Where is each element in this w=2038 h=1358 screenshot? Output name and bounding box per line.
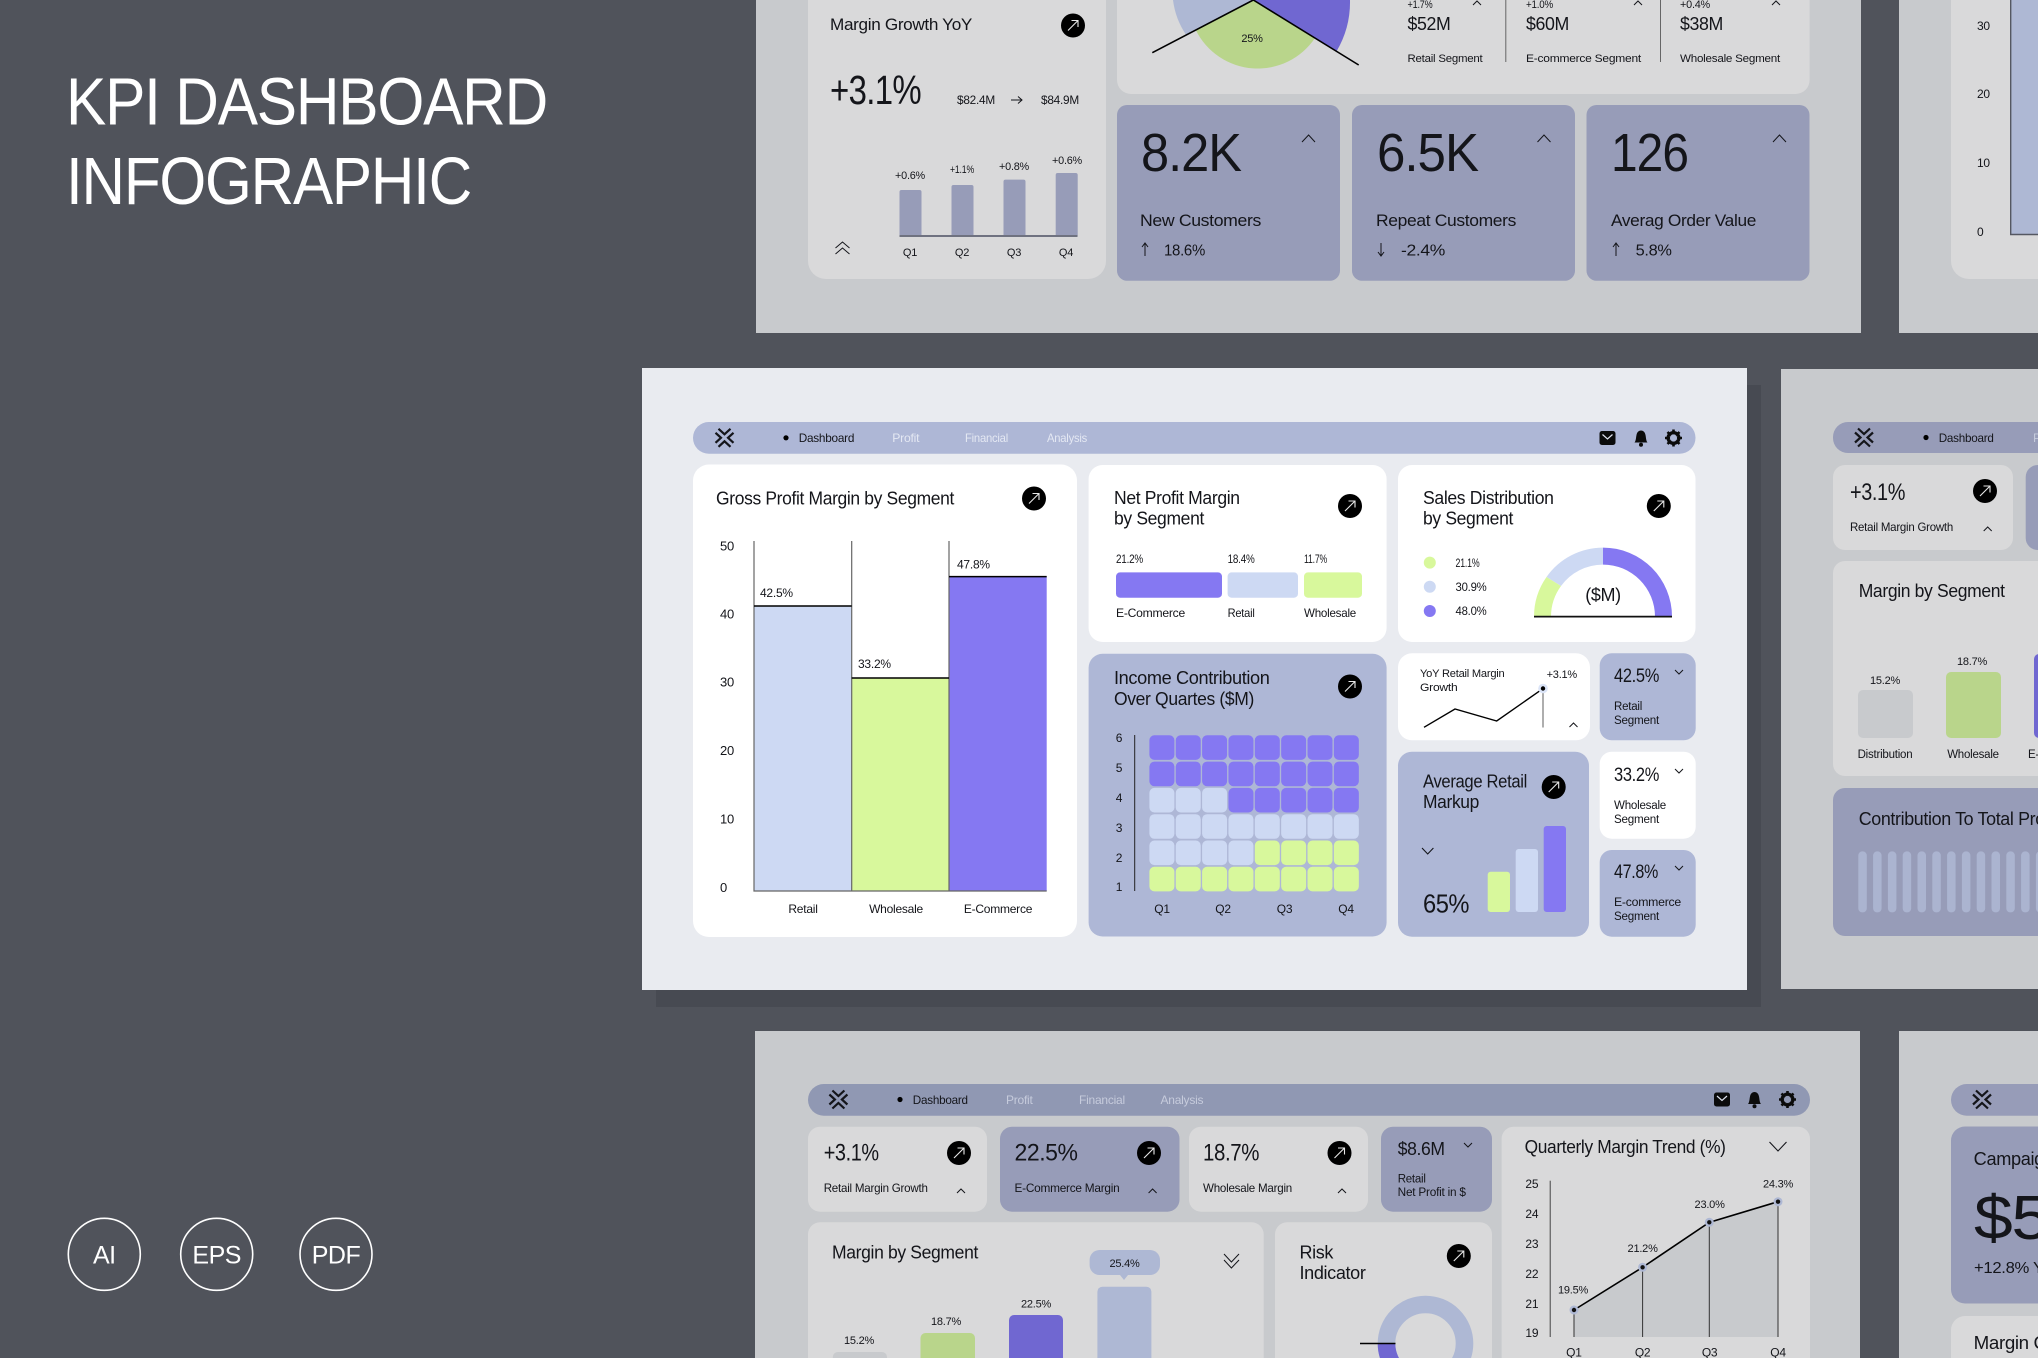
nav bar: [1951, 1084, 2038, 1116]
legend: 30.9%: [1456, 580, 1487, 594]
card: quarterly margin trend: 19: [1525, 1326, 1539, 1340]
card: e-commerce segment: [1600, 850, 1696, 937]
panel: top right dashboard (dimmed): 10: [1977, 156, 1990, 170]
tooltip: 25.4%: [1109, 1258, 1140, 1270]
card: income contribution over quarters: Q1: [1154, 902, 1170, 916]
card: net profit margin by segment: 11.7%: [1304, 552, 1327, 566]
card: net profit margin by segment: Net Profit Margin: [1114, 488, 1240, 508]
card: margin growth yoy: Q2: [955, 247, 969, 259]
card: margin by segment: 22.5%: [1021, 1299, 1051, 1311]
nav bar: Dashboard: [1939, 431, 1994, 445]
card: income contribution over quarters: [1089, 654, 1387, 936]
panel: bottom right dashboard (dimmed): [1899, 1031, 2038, 1358]
card: retail segment: [1600, 653, 1696, 740]
card: income contribution over quarters: 6: [1116, 731, 1123, 745]
card: income contribution over quarters: 5: [1116, 761, 1123, 775]
card: margin growth: [1951, 1316, 2038, 1358]
card: segment revenue with pie: Retail Segment: [1408, 53, 1483, 65]
card: income contribution over quarters: 2: [1116, 851, 1123, 865]
bar chart: [754, 541, 1047, 891]
card: income contribution over quarters: 4: [1116, 791, 1123, 805]
card: income contribution over quarters: Q3: [1277, 902, 1293, 916]
card: yoy retail margin growth: YoY Retail Margin: [1420, 668, 1505, 680]
card: average retail markup: [1398, 752, 1589, 937]
card: new customers: [1117, 105, 1340, 281]
tooltip: [1090, 1250, 1160, 1280]
card: margin growth yoy: Q4: [1059, 247, 1073, 259]
card: quarterly margin trend: 22: [1525, 1267, 1539, 1281]
kpi: retail margin growth: [808, 1127, 987, 1212]
card: margin growth yoy: +3.1%: [830, 67, 921, 113]
central panel shadow: [656, 385, 1761, 1007]
card: margin by segment: 15.2%: [844, 1335, 874, 1347]
heatmap grid: [1149, 735, 1359, 891]
title: [66, 65, 547, 219]
kpi: retail margin growth: Retail Margin Growth: [824, 1181, 928, 1195]
card: income contribution over quarters: Income Contribution: [1114, 668, 1270, 688]
card: income contribution over quarters: 3: [1116, 821, 1123, 835]
card: average order value: 5.8%: [1636, 243, 1672, 260]
card: income contribution over quarters: Q4: [1338, 902, 1354, 916]
card: income contribution over quarters: Q2: [1215, 902, 1231, 916]
gauge chart: ($M): [1585, 585, 1621, 605]
card: quarterly margin trend: 25: [1525, 1177, 1539, 1191]
card: margin by segment: 15.2%: [1870, 675, 1900, 687]
card: quarterly margin trend: 24: [1525, 1207, 1539, 1221]
card: quarterly margin trend: 21: [1525, 1297, 1539, 1311]
bar chart: 42.5%: [760, 586, 793, 600]
card: retail segment: 42.5%: [1614, 666, 1659, 687]
card: margin growth yoy: +0.6%: [1052, 155, 1082, 167]
card: new customers: New Customers: [1140, 211, 1261, 230]
card: segment revenue with pie: $52M: [1408, 14, 1450, 34]
kpi: wholesale margin: 18.7%: [1203, 1140, 1259, 1167]
card: quarterly margin trend: 21.2%: [1628, 1243, 1658, 1255]
card: repeat customers: 6.5K: [1377, 123, 1479, 183]
chart axis labels: 0: [720, 880, 727, 895]
file format badges: PDF: [312, 1242, 360, 1270]
card: segment revenue with pie: 25%: [1241, 33, 1263, 45]
kpi: retail net profit: $8.6M: [1398, 1139, 1445, 1159]
card: margin growth yoy: +0.8%: [999, 161, 1029, 173]
legend: 48.0%: [1456, 604, 1487, 618]
kpi: retail margin growth: +3.1%: [824, 1140, 879, 1167]
kpi: retail net profit: Retail: [1398, 1174, 1426, 1186]
card: margin growth yoy: +1.1%: [950, 164, 974, 176]
card: segment revenue with pie: $38M: [1680, 14, 1723, 34]
kpi card: [1833, 465, 2038, 550]
title: KPI DASHBOARD: [66, 65, 547, 140]
card: wholesale segment: 33.2%: [1614, 765, 1659, 786]
card: quarterly margin trend: 23: [1525, 1237, 1539, 1251]
bar chart: 33.2%: [858, 657, 891, 671]
card: average retail markup: Markup: [1423, 792, 1479, 812]
card: segment revenue with pie: $60M: [1526, 14, 1569, 34]
card: quarterly margin trend: 19.5%: [1558, 1284, 1588, 1296]
card: yoy retail margin growth: [1398, 653, 1590, 740]
chart axis labels: 10: [720, 812, 734, 826]
legend: 21.1%: [1456, 556, 1480, 570]
gauge chart: [1534, 548, 1672, 617]
card: margin by segment: 18.7%: [931, 1316, 961, 1328]
card: yoy retail margin growth: Growth: [1420, 682, 1458, 694]
kpi card: Retail Margin Growth: [1850, 520, 1953, 534]
nav bar: Financial: [1079, 1093, 1125, 1107]
card: margin growth yoy: Q1: [903, 247, 917, 259]
card: average order value: Averag Order Value: [1611, 211, 1756, 230]
file format badges: AI: [93, 1242, 116, 1270]
card: average retail markup: Average Retail: [1423, 772, 1527, 792]
card: net profit margin by segment: by Segment: [1114, 509, 1204, 529]
kpi: wholesale margin: Wholesale Margin: [1203, 1181, 1292, 1195]
panel: top right dashboard (dimmed): [1899, 0, 2038, 333]
card: gross profit margin by segment: E-Commerce: [964, 902, 1033, 916]
card: net profit margin by segment: Wholesale: [1304, 606, 1357, 620]
card: segment revenue with pie: [1117, 0, 1810, 94]
file format badges: EPS: [192, 1242, 241, 1270]
card: new customers: 8.2K: [1141, 123, 1242, 183]
card: margin by segment: [1833, 561, 2038, 776]
card: risk indicator: [1275, 1222, 1492, 1358]
kpi: e-commerce margin: [1000, 1127, 1180, 1212]
nav bar: Financial: [965, 431, 1008, 445]
card: margin growth yoy: [808, 0, 1106, 279]
card: average order value: 126: [1611, 123, 1688, 183]
nav bar: [693, 422, 1696, 454]
card: income contribution over quarters: 1: [1116, 880, 1123, 894]
card: gross profit margin by segment: Gross Profit Margin by Segment: [716, 488, 954, 508]
card: gross profit margin by segment: Wholesale: [869, 902, 923, 916]
card: wholesale segment: Segment: [1614, 814, 1660, 826]
card: risk indicator: Risk: [1300, 1242, 1334, 1262]
card: repeat customers: Repeat Customers: [1376, 211, 1516, 230]
kpi: e-commerce margin: E-Commerce Margin: [1014, 1181, 1120, 1195]
card: wholesale segment: Wholesale: [1614, 800, 1666, 812]
card: average retail markup: 65%: [1423, 889, 1469, 919]
chart axis labels: [720, 538, 734, 895]
card: average order value: [1586, 105, 1810, 281]
panel: bottom dashboard (dimmed): [755, 1031, 1860, 1358]
card: retail segment: Retail: [1614, 701, 1642, 713]
card: income contribution over quarters: Over Quartes ($M): [1114, 689, 1254, 709]
card: quarterly margin trend: 23.0%: [1695, 1199, 1725, 1211]
card: campaign: [1951, 1126, 2038, 1304]
card: margin growth yoy: $84.9M: [1041, 93, 1079, 107]
nav bar: Profit: [892, 431, 920, 445]
card: wholesale segment: [1600, 752, 1696, 839]
file format badges: [68, 1218, 372, 1290]
nav bar: Analysis: [1047, 431, 1087, 445]
chart axis labels: 20: [720, 743, 734, 758]
card: net profit margin by segment: 18.4%: [1228, 552, 1255, 566]
card: segment revenue with pie: Wholesale Segment: [1680, 53, 1780, 65]
card: net profit margin by segment: 21.2%: [1116, 552, 1143, 566]
card: risk indicator: Indicator: [1300, 1263, 1366, 1283]
card: net profit margin by segment: E-Commerce: [1116, 606, 1186, 620]
card: e-commerce segment: Segment: [1614, 911, 1660, 923]
nav bar: Profit: [1006, 1093, 1033, 1107]
card: segment revenue with pie: E-commerce Segment: [1526, 53, 1641, 65]
card: margin by segment: Margin by Segment: [1859, 581, 2005, 601]
panel: right middle dashboard (dimmed): [1781, 369, 2038, 989]
card: margin growth yoy: Margin Growth YoY: [830, 15, 972, 34]
card: sales distribution by segment: [1398, 465, 1696, 642]
card: new customers: 18.6%: [1164, 243, 1205, 260]
title: INFOGRAPHIC: [66, 144, 471, 219]
nav bar: Analysis: [1160, 1093, 1204, 1107]
card: margin by segment: Distribution: [1858, 749, 1912, 761]
chart axis labels: 40: [720, 606, 734, 622]
panel: top right dashboard (dimmed): 30: [1977, 19, 1990, 33]
chart axis labels: 30: [720, 674, 734, 690]
kpi: retail net profit: [1381, 1127, 1492, 1212]
card: repeat customers: -2.4%: [1401, 243, 1445, 260]
kpi: wholesale margin: [1189, 1127, 1368, 1212]
nav bar: Dashboard: [799, 431, 854, 445]
card: repeat customers: [1352, 105, 1575, 281]
card: margin by segment: Margin by Segment: [832, 1242, 978, 1262]
nav bar: Dashboard: [913, 1093, 968, 1107]
card: margin growth yoy: Q3: [1007, 247, 1021, 259]
card: retail segment: Segment: [1614, 715, 1660, 727]
panel: top right dashboard (dimmed): 0: [1977, 225, 1984, 239]
card: margin by segment: [808, 1222, 1264, 1358]
card: quarterly margin trend: Quarterly Margin Trend (%): [1525, 1137, 1726, 1157]
card: net profit margin by segment: [1089, 465, 1387, 642]
chart axis labels: 50: [720, 538, 734, 554]
card: margin by segment: Wholesale: [1947, 749, 1999, 761]
card: contribution to total profit: [1833, 788, 2038, 936]
nav bar: [1833, 422, 2038, 453]
panel: central dashboard: [642, 368, 1747, 990]
panel: top dashboard (dimmed): [756, 0, 1861, 333]
card: sales distribution by segment: by Segment: [1423, 509, 1513, 529]
kpi: retail net profit: Net Profit in $: [1398, 1187, 1467, 1199]
card: e-commerce segment: E-commerce: [1614, 897, 1681, 909]
legend: [1424, 556, 1487, 618]
card: gross profit margin by segment: [693, 464, 1077, 937]
card: gross profit margin by segment: Retail: [788, 902, 818, 916]
kpi card: +3.1%: [1850, 479, 1905, 506]
bar chart: 47.8%: [957, 558, 990, 572]
card: margin growth yoy: +0.6%: [895, 170, 925, 182]
panel: top right dashboard (dimmed): 20: [1977, 87, 1990, 101]
card: quarterly margin trend: [1502, 1127, 1810, 1358]
nav bar: [808, 1084, 1810, 1116]
card: sales distribution by segment: Sales Distribution: [1423, 488, 1554, 508]
kpi: e-commerce margin: 22.5%: [1014, 1140, 1078, 1167]
card: margin growth yoy: $82.4M: [957, 93, 995, 107]
card: quarterly margin trend: 24.3%: [1763, 1179, 1793, 1191]
card: margin by segment: 18.7%: [1957, 656, 1987, 668]
card: net profit margin by segment: Retail: [1228, 606, 1255, 620]
card: yoy retail margin growth: +3.1%: [1547, 669, 1577, 681]
card: e-commerce segment: 47.8%: [1614, 862, 1658, 883]
